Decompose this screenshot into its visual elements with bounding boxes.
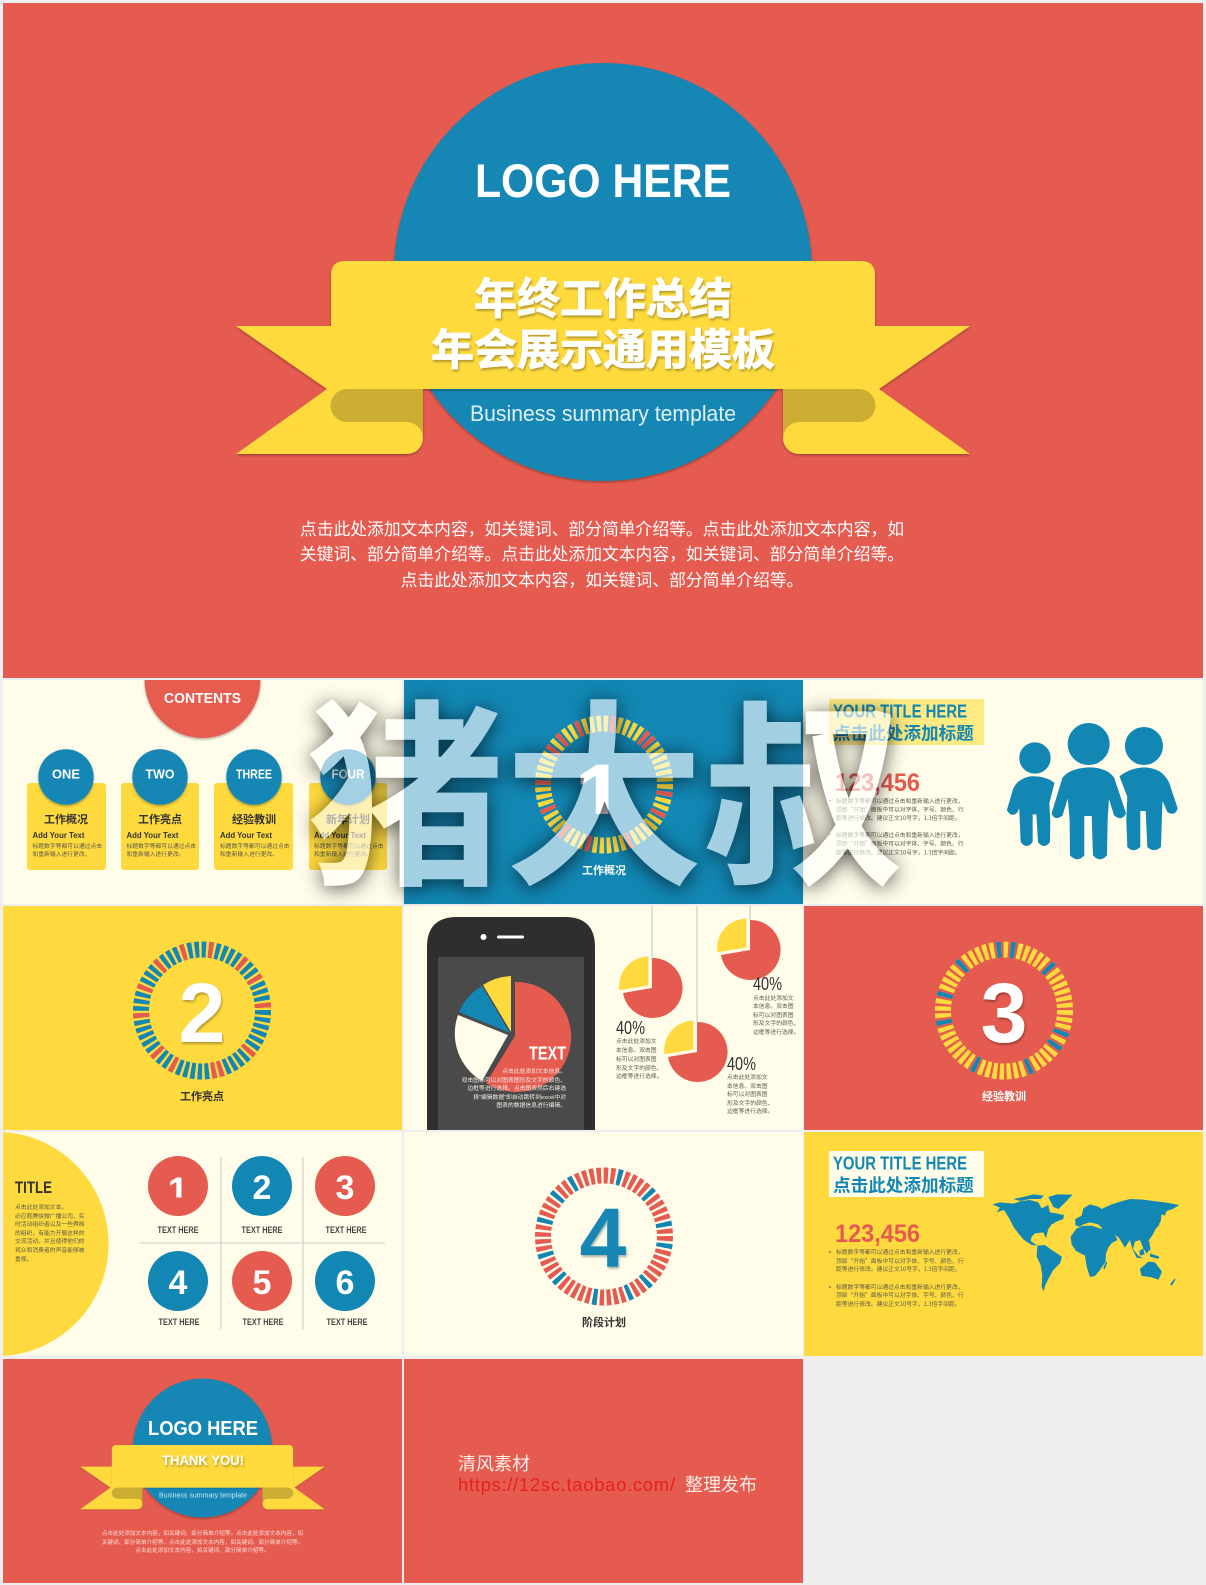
card one: ONE <box>52 768 80 782</box>
pie B text: 标可以对图表图 <box>753 1010 794 1019</box>
number 1: 1 <box>574 746 626 848</box>
card one: 标题数字等都可以通过点击 <box>32 841 102 850</box>
phone text: 边框等进行选择。点击图表然后右键选 <box>467 1084 566 1092</box>
card one <box>27 749 106 870</box>
pie C text: 边框等进行选择。 <box>727 1106 773 1115</box>
pie C text: 40% <box>727 1054 756 1074</box>
panel: thank you <box>3 1359 402 1583</box>
panel: title and map <box>804 1132 1203 1356</box>
description: 点击此处添加文本。 <box>15 1202 67 1211</box>
bullet text: 顶部“开始”面板中可以对字体、字号、颜色、行 <box>836 838 964 848</box>
pie A text: 边框等进行选择。 <box>616 1071 662 1080</box>
description: 观众和消费者的声音能够被 <box>15 1245 85 1254</box>
bullet text: 距等进行修改。建议正文10号字，1.3倍字间距。 <box>836 1264 961 1273</box>
item 5: TEXT HERE <box>242 1317 284 1327</box>
item 3: TEXT HERE <box>326 1225 366 1235</box>
ring 4 <box>543 1176 665 1298</box>
bullet text: 顶部“开始”面板中可以对字体、字号、颜色、行 <box>836 1256 964 1265</box>
contents heading: CONTENTS <box>164 691 241 707</box>
ring 1 <box>543 724 665 846</box>
card four: FOUR <box>332 768 364 782</box>
logo text: LOGO HERE <box>148 1417 258 1440</box>
description: 时活动组织者以及一些舆档 <box>15 1219 85 1228</box>
phone text: 择“编辑数据”即自动跳转到excel中对 <box>473 1093 566 1101</box>
item 6: 6 <box>336 1264 354 1302</box>
pie A text: 40% <box>616 1018 645 1038</box>
panel: phone and pies <box>404 906 803 1130</box>
item 1 <box>148 1156 208 1235</box>
panel: contents <box>3 680 402 904</box>
card one: 和重新输入进行更改。 <box>32 849 90 858</box>
pie B text: 形及文字的颜色、 <box>753 1018 799 1027</box>
card three: THREE <box>236 768 272 782</box>
watermark <box>305 637 903 927</box>
pie C text: 点击此处添加文 <box>727 1072 768 1081</box>
card three <box>214 749 293 870</box>
ribbon title: 年会展示通用模板 <box>431 316 775 378</box>
phone <box>427 917 595 1130</box>
pie B text: 边框等进行选择。 <box>753 1027 799 1036</box>
ribbon <box>80 1445 325 1509</box>
bullet text: 标题数字等都可以通过点击和重新输入进行更改， <box>836 796 964 805</box>
card one: 工作概况 <box>44 811 88 827</box>
number 4: 4 <box>580 1191 627 1285</box>
pie A text: 标可以对图表图 <box>616 1054 657 1063</box>
pie A text: 点击此处添加文 <box>616 1036 657 1045</box>
pie C text: 形及文字的颜色、 <box>727 1098 773 1107</box>
hanging pie A <box>619 906 683 1018</box>
pie B text: 点击此处添加文 <box>753 993 794 1002</box>
bullet text <box>829 796 964 856</box>
bullet text: 标题数字等都可以通过点击和重新输入进行更改， <box>836 830 964 839</box>
closing text <box>102 1529 304 1554</box>
item 1: TEXT HERE <box>158 1225 198 1235</box>
title box: YOUR TITLE HERE <box>833 702 967 722</box>
panel: hero cover <box>3 3 1203 678</box>
item 1: 1 <box>168 1170 188 1211</box>
watermark: 猪 <box>305 637 505 927</box>
number 3: 3 <box>981 966 1027 1060</box>
panel: six items <box>3 1132 402 1356</box>
card two <box>121 749 199 870</box>
closing text: 关键词、部分简单介绍等。点击此处添加文本内容，如关键词、部分简单介绍等。 <box>102 1538 303 1546</box>
bullet text <box>829 1247 964 1308</box>
ring 2 <box>141 950 263 1072</box>
pie C text: 本信息。双击图 <box>727 1081 768 1090</box>
title box: YOUR TITLE HERE <box>833 1154 967 1174</box>
thank you text: THANK YOU! <box>162 1453 244 1468</box>
section label: 工作亮点 <box>180 1088 224 1104</box>
title box: 点击此处添加标题 <box>833 720 974 746</box>
card three: 经验教训 <box>232 811 276 827</box>
card four: Add Your Text <box>314 831 366 840</box>
panel: section 4 <box>404 1132 803 1356</box>
pie B text: 40% <box>753 974 782 994</box>
logo circle <box>133 1378 272 1518</box>
item 6 <box>315 1251 375 1327</box>
phone text <box>462 1044 566 1109</box>
item 4: 4 <box>169 1264 188 1302</box>
panel: section 1 <box>404 680 803 904</box>
phone text: TEXT <box>529 1044 566 1064</box>
title: TITLE <box>15 1179 52 1197</box>
card three: 标题数字等都可以通过点击 <box>220 841 290 850</box>
contents tab <box>144 680 260 738</box>
card four <box>309 749 387 870</box>
description: 必应股腾侠微广播公司、实 <box>15 1211 85 1220</box>
pie B text: 本信息。双击图 <box>753 1001 794 1010</box>
pie C text <box>727 1054 773 1115</box>
panel: section 2 <box>3 906 402 1130</box>
bullet text: 顶部“开始”面板中可以对字体、字号、颜色、行 <box>836 804 964 814</box>
item 5 <box>232 1251 292 1327</box>
subtitle: Business summary template <box>159 1490 247 1500</box>
intro text: 点击此处添加文本内容，如关键词、部分简单介绍等。 <box>401 567 803 591</box>
ribbon title <box>431 265 775 378</box>
card three: 和重新输入进行更改。 <box>220 849 278 858</box>
bullet text: 距等进行修改。建议正文10号字，1.3倍字间距。 <box>836 1299 961 1308</box>
subtitle: Business summary template <box>470 401 736 426</box>
section label: 经验教训 <box>982 1088 1026 1104</box>
item 2: TEXT HERE <box>242 1225 282 1235</box>
watermark: 叔 <box>703 637 903 927</box>
phone text: 双击图标可以对图表图形及文字的颜色、 <box>462 1076 566 1084</box>
yellow semicircle <box>3 1132 109 1356</box>
panel: section 3 <box>804 906 1203 1130</box>
logo circle <box>394 63 812 481</box>
closing text: 点击此处添加文本内容，如关键词、部分简单介绍等。点击此处添加文本内容，如 <box>102 1529 304 1537</box>
phone pie chart <box>455 976 571 1092</box>
number: 123,456 <box>835 769 920 797</box>
pie A text <box>616 1018 662 1080</box>
description: 重视。 <box>15 1254 32 1263</box>
card four: 新年计划 <box>326 811 370 827</box>
credit link: https://12sc.taobao.com/ <box>458 1474 676 1495</box>
item 4: TEXT HERE <box>158 1317 200 1327</box>
bullet text: 距等进行修改。建议正文10号字，1.3倍字间距。 <box>836 813 961 822</box>
item 4 <box>148 1251 208 1327</box>
number: 123,456 <box>835 1220 920 1248</box>
item 5: 5 <box>253 1264 271 1302</box>
title box <box>829 1151 984 1198</box>
card two: Add Your Text <box>126 831 179 840</box>
card three: Add Your Text <box>220 831 272 840</box>
number 2: 2 <box>179 966 225 1060</box>
panel: credits <box>404 1359 803 1583</box>
credit suffix: 整理发布 <box>685 1471 757 1497</box>
phone text: 点击此处添加文本信息。 <box>502 1067 566 1075</box>
item 3 <box>315 1156 375 1235</box>
ribbon <box>236 261 970 454</box>
intro text: 点击此处添加文本内容，如关键词、部分简单介绍等。点击此处添加文本内容，如 <box>300 516 904 540</box>
ring 3 <box>943 950 1065 1072</box>
card two: 工作亮点 <box>138 811 182 827</box>
pie B text <box>753 974 799 1036</box>
bullet text: 标题数字等都可以通过点击和重新输入进行更改， <box>836 1282 964 1291</box>
panel: title and people <box>804 680 1203 904</box>
intro text <box>300 516 904 591</box>
bullet text: 顶部“开始”面板中可以对字体、字号、颜色、行 <box>836 1290 964 1299</box>
section label: 工作概况 <box>582 862 626 878</box>
closing text: 点击此处添加文本内容，如关键词、部分简单介绍等。 <box>135 1546 270 1554</box>
pie C text: 标可以对图表图 <box>727 1089 768 1098</box>
pie A text: 本信息。双击图 <box>616 1045 657 1054</box>
item 3: 3 <box>336 1169 354 1207</box>
card two: 和重新输入进行更改。 <box>126 849 184 858</box>
description <box>15 1202 85 1263</box>
logo text: LOGO HERE <box>475 154 731 207</box>
hanging pie C <box>664 906 728 1082</box>
card four: 标题数字等都可以通过点击 <box>314 841 384 850</box>
item 6: TEXT HERE <box>326 1317 368 1327</box>
world map <box>992 1194 1179 1291</box>
title box: 点击此处添加标题 <box>833 1172 974 1198</box>
phone text: 图表的数据信息进行编辑。 <box>496 1101 566 1109</box>
item 2: 2 <box>253 1169 271 1207</box>
ribbon title: 年终工作总结 <box>474 265 732 327</box>
watermark: 大 <box>504 637 704 927</box>
hanging pie B <box>717 906 781 980</box>
bullet text: 标题数字等都可以通过点击和重新输入进行更改， <box>836 1247 964 1256</box>
title box <box>829 699 984 746</box>
bullet text: 距等进行修改。建议正文10号字，1.3倍字间距。 <box>836 848 961 856</box>
card one: Add Your Text <box>32 831 85 840</box>
intro text: 关键词、部分简单介绍等。点击此处添加文本内容，如关键词、部分简单介绍等。 <box>300 541 904 565</box>
card two: TWO <box>146 768 175 782</box>
section label: 阶段计划 <box>582 1314 626 1330</box>
card two: 标题数字等都可以通过点击 <box>126 841 196 850</box>
icon: people <box>1008 724 1177 858</box>
description: 交流活动，并且使得他们的 <box>15 1236 85 1245</box>
card four: 和重新输入进行更改。 <box>314 849 372 858</box>
credit text: 清风素材 <box>458 1450 530 1476</box>
item 2 <box>232 1156 292 1235</box>
pie A text: 形及文字的颜色、 <box>616 1063 662 1072</box>
description: 的组织，有能力开展这样的 <box>15 1228 85 1237</box>
